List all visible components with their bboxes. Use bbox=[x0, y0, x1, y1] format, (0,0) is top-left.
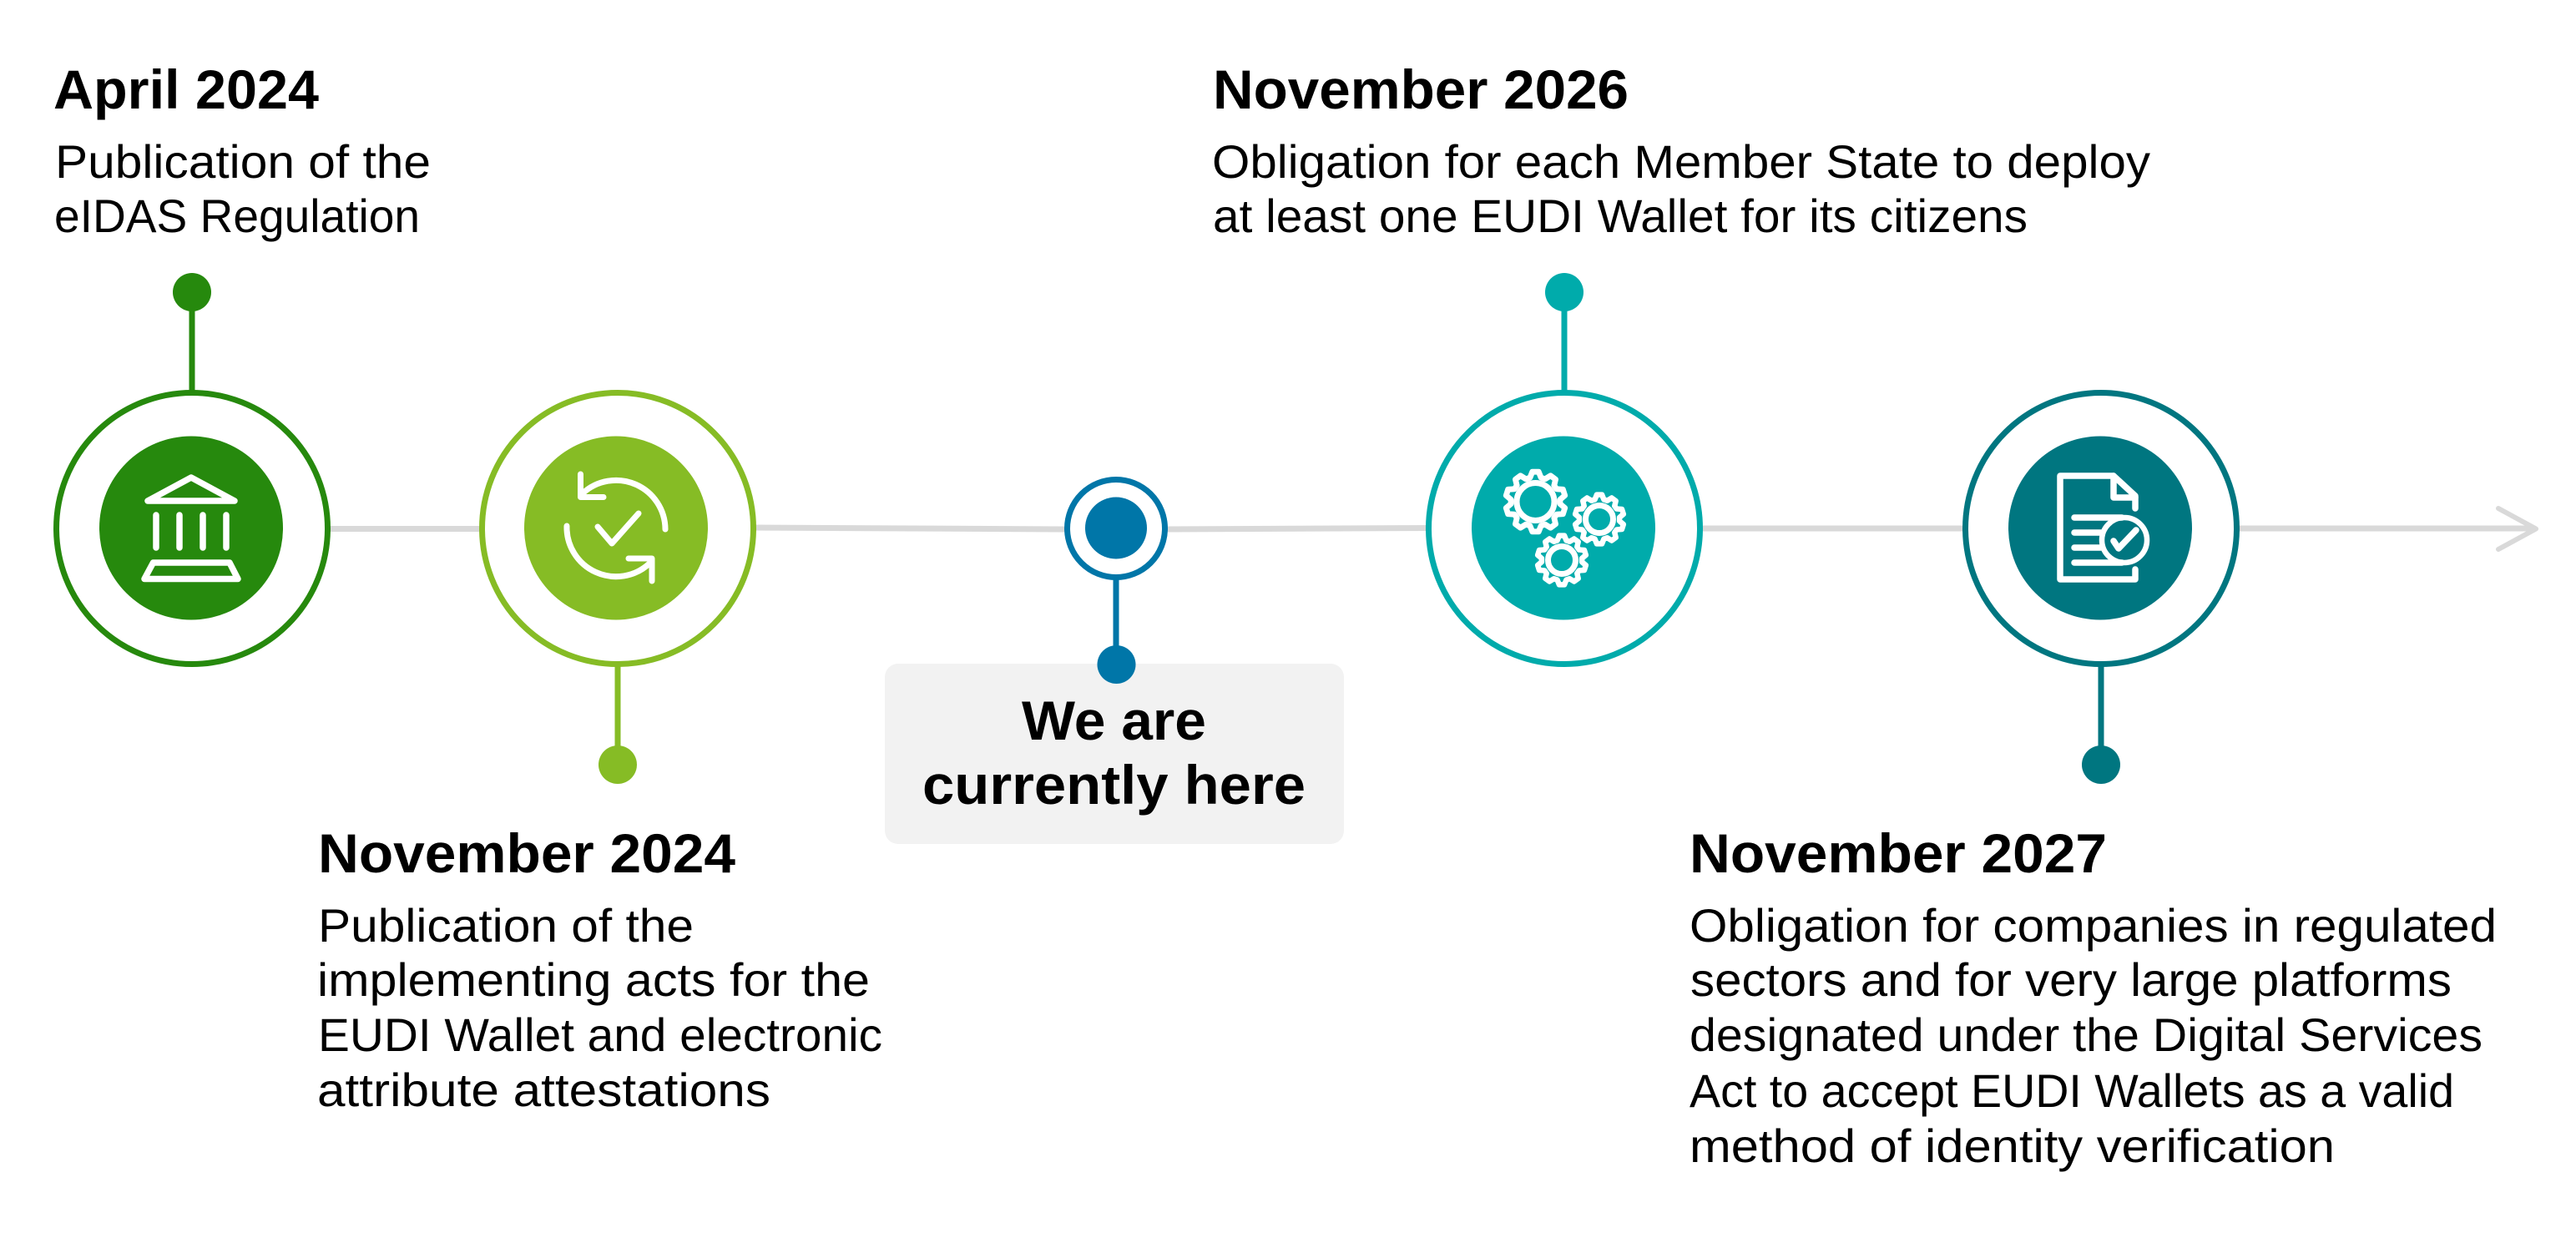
text: November 2024 description: EUDI Wallet and electronic bbox=[318, 1008, 882, 1061]
icon: document with check bbox=[1965, 392, 2237, 664]
connector: April 2024 bbox=[173, 273, 211, 392]
heading: November 2026: November 2026 bbox=[1213, 58, 1629, 120]
text: November 2027 description: Act to accept EUDI Wallets as a valid bbox=[1690, 1064, 2454, 1117]
callout box bbox=[885, 664, 1344, 844]
heading: November 2024: November 2024 bbox=[318, 822, 735, 884]
text: November 2026 description bbox=[1212, 135, 2150, 242]
text: November 2024 description: Publication of the bbox=[318, 899, 694, 952]
text: November 2024 description bbox=[317, 899, 882, 1116]
text: November 2027 description: method of identity verification bbox=[1690, 1119, 2335, 1172]
text: November 2027 description: sectors and for very large platforms bbox=[1690, 953, 2452, 1006]
text: November 2027 description: designated under the Digital Services bbox=[1690, 1008, 2483, 1061]
text: November 2027 description bbox=[1690, 899, 2497, 1172]
timeline arrow bbox=[326, 508, 2536, 549]
milestone: November 2027 bbox=[1690, 392, 2497, 1172]
icon: gears bbox=[1429, 392, 1700, 664]
milestone: April 2024 bbox=[53, 58, 431, 664]
heading: April 2024: April 2024 bbox=[53, 58, 319, 120]
icon: refresh with check bbox=[482, 392, 753, 664]
text: November 2026 description: Obligation for each Member State to deploy bbox=[1212, 135, 2150, 188]
text: November 2024 description: attribute attestations bbox=[317, 1064, 770, 1116]
callout text bbox=[922, 690, 1306, 816]
text: April 2024 description: Publication of the bbox=[55, 135, 431, 188]
text: November 2026 description: at least one EUDI Wallet for its citizens bbox=[1213, 189, 2028, 242]
text: April 2024 description: eIDAS Regulation bbox=[54, 189, 420, 242]
text: November 2024 description: implementing acts for the bbox=[317, 953, 870, 1006]
text: April 2024 description bbox=[54, 135, 431, 242]
icon: bank building bbox=[57, 392, 327, 664]
marker: current position bbox=[1067, 479, 1165, 684]
callout text: We are bbox=[1022, 690, 1206, 751]
text: November 2027 description: Obligation for companies in regulated bbox=[1690, 899, 2497, 952]
callout: we are currently here bbox=[885, 479, 1344, 844]
milestone: November 2026 bbox=[1212, 58, 2150, 664]
connector: November 2027 bbox=[2082, 664, 2120, 784]
connector: November 2024 bbox=[599, 664, 637, 784]
connector: November 2026 bbox=[1545, 273, 1583, 392]
milestone: November 2024 bbox=[317, 392, 882, 1116]
heading: November 2027: November 2027 bbox=[1690, 822, 2107, 884]
callout text: currently here bbox=[922, 754, 1306, 816]
